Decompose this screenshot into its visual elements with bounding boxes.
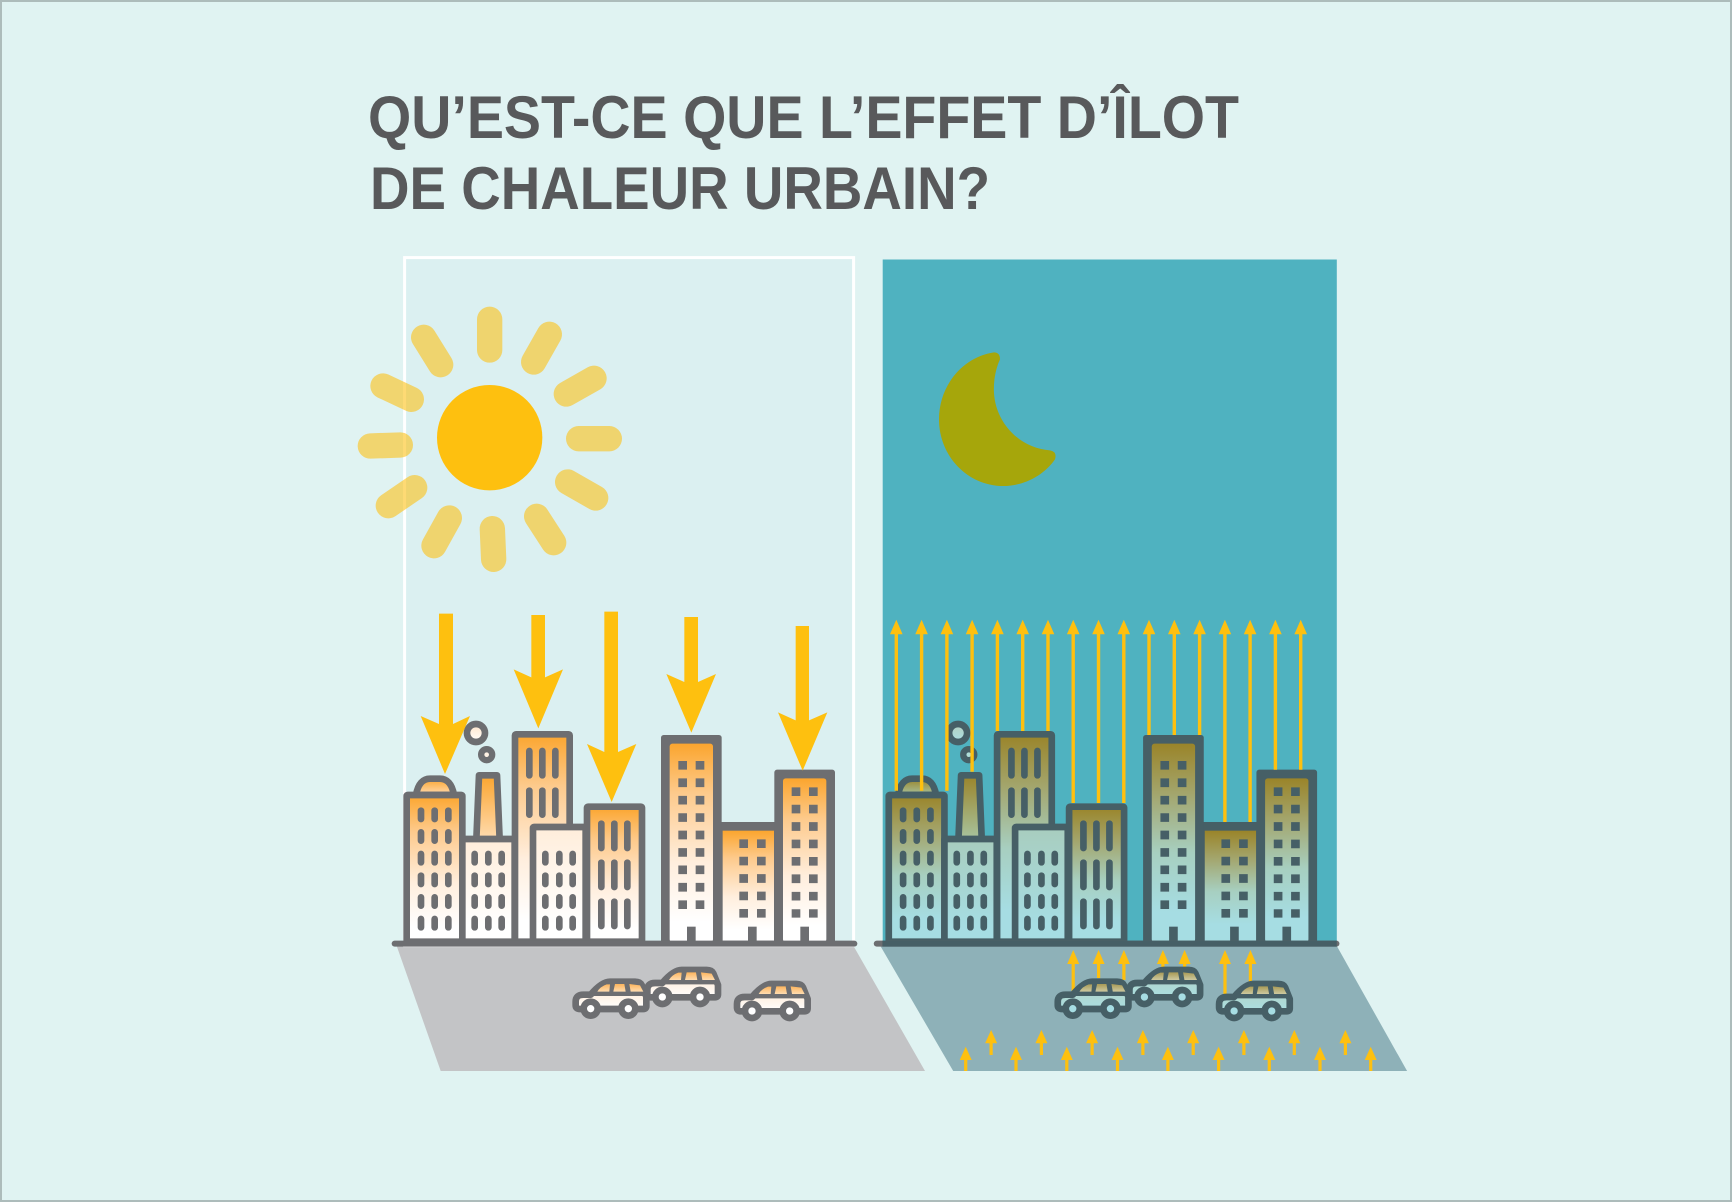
rising heat arrows — [890, 620, 1307, 822]
building: front block — [1015, 827, 1068, 942]
building: mid tower — [587, 807, 642, 942]
day city — [395, 724, 854, 1018]
panel: night — [877, 260, 1407, 1071]
day sky — [405, 258, 854, 946]
icon: car 2 — [1129, 970, 1200, 1004]
title line 2: DE CHALEUR URBAIN? — [370, 155, 990, 222]
sun disc — [437, 385, 542, 490]
arrow 5 — [778, 626, 827, 771]
title — [368, 84, 1239, 222]
night sky — [883, 260, 1337, 944]
building: right tower — [774, 770, 835, 944]
building: factory — [944, 775, 997, 942]
arrow 4 — [666, 617, 716, 733]
building: low block — [1199, 822, 1261, 944]
icon: car 3 — [737, 984, 808, 1018]
building: tall back tower — [997, 734, 1052, 942]
arrow 2 — [514, 615, 563, 728]
arrow 3 — [587, 612, 636, 802]
sun rays — [370, 319, 609, 559]
title line 1: QU’EST-CE QUE L’EFFET D’ÎLOT — [368, 84, 1239, 151]
smoke — [949, 724, 974, 760]
building: front block — [533, 827, 586, 942]
icon: moon — [939, 352, 1056, 486]
road heat arrows — [960, 950, 1377, 1071]
ground line — [395, 935, 854, 953]
building: mid tower — [1069, 807, 1124, 942]
building: factory — [462, 775, 515, 942]
icon: car 2 — [647, 970, 718, 1004]
arrow 1 — [421, 614, 470, 774]
building: tall back tower — [515, 734, 570, 942]
building: tower right of gap — [661, 735, 722, 944]
panel: day — [370, 258, 925, 1071]
night city — [877, 724, 1337, 1018]
night road — [880, 946, 1407, 1071]
building: right tower — [1256, 770, 1317, 944]
icon: car 1 — [576, 982, 646, 1016]
sun heat arrows — [421, 612, 827, 802]
building: dome tower — [407, 779, 462, 942]
building: dome tower — [889, 779, 944, 942]
smoke — [467, 724, 492, 760]
day road — [397, 946, 925, 1071]
icon: sun — [370, 319, 609, 559]
building: low block — [717, 822, 779, 944]
icon: car 3 — [1219, 984, 1290, 1018]
icon: car 1 — [1058, 982, 1128, 1016]
ground line — [877, 935, 1337, 953]
building: tower right of gap — [1143, 735, 1204, 944]
